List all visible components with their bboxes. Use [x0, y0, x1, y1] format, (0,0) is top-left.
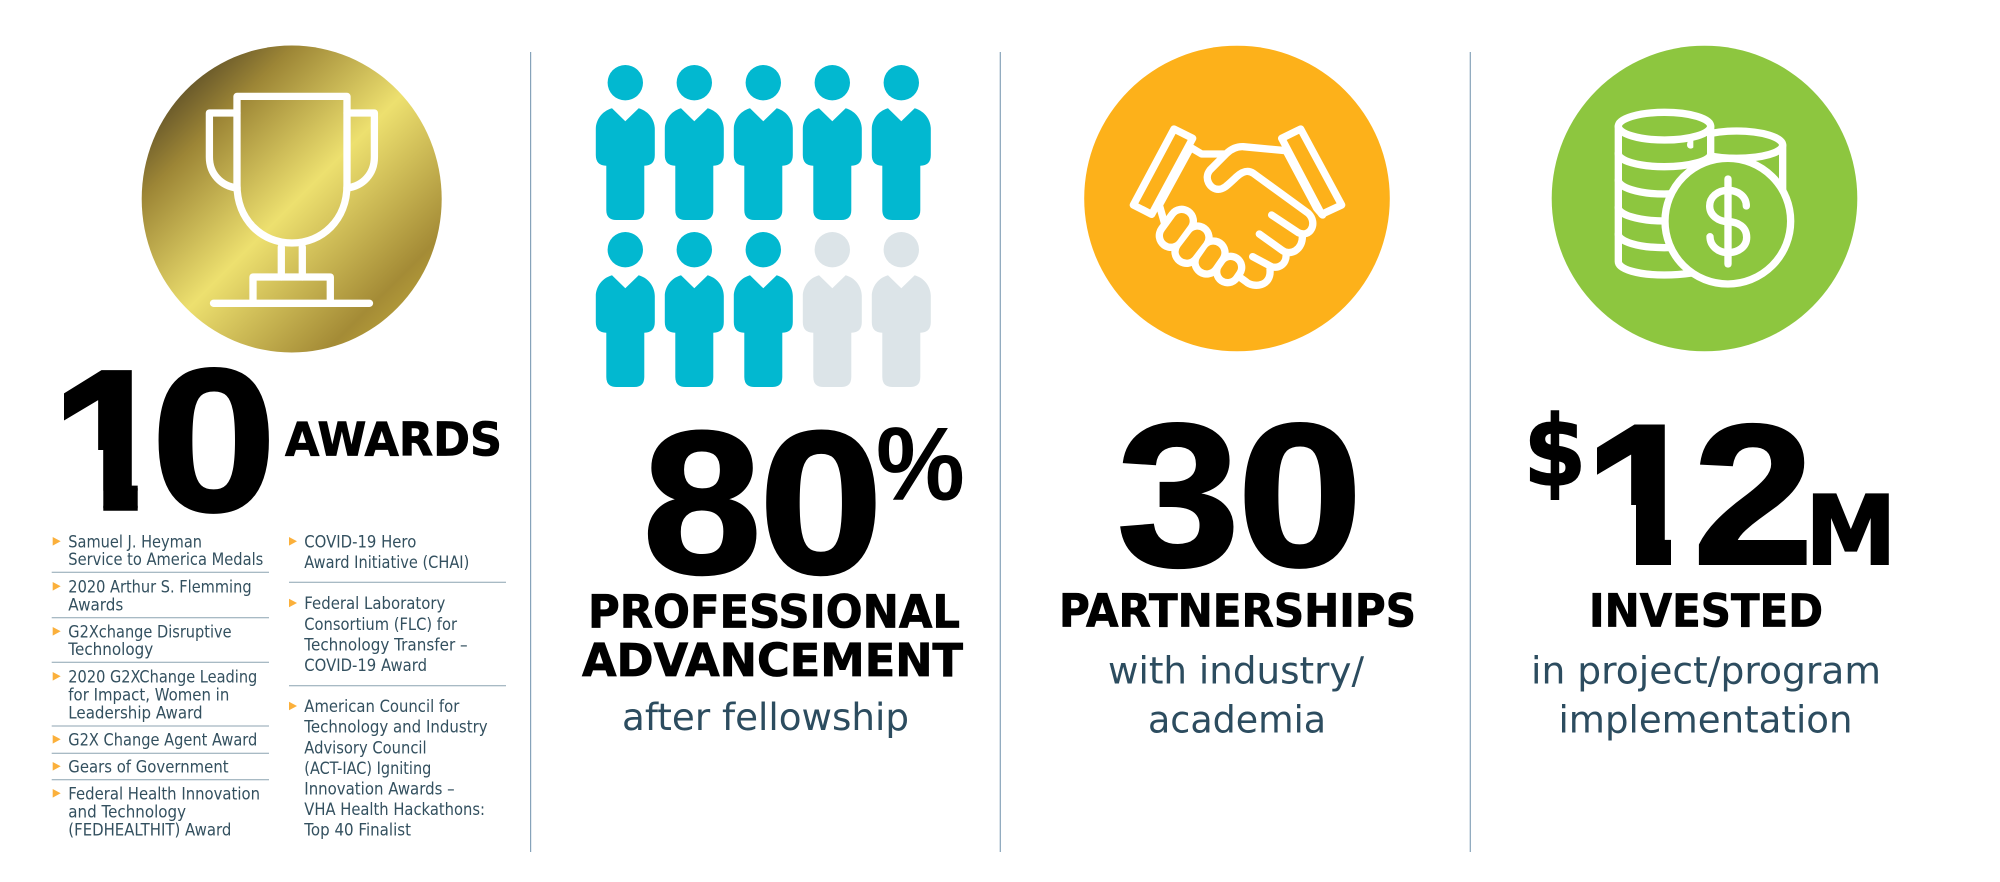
- big number 10: 0: [151, 326, 277, 554]
- award: FEDHEALTHIT: [53, 784, 260, 839]
- award: FEDHEALTHIT: and Technology: [68, 802, 186, 821]
- award: Heyman medals: Service to America Medals: [68, 550, 263, 569]
- list: awards column two: [289, 532, 506, 840]
- caption: in project/program implementation: implementation: [1558, 698, 1852, 741]
- award: G2XChange leading: [53, 667, 257, 722]
- award: Heyman medals: [53, 532, 263, 569]
- icon: coins in green circle: [1552, 46, 1857, 351]
- award: change agent: G2X Change Agent Award: [68, 731, 257, 750]
- award: ACT-IAC: American Council for: [304, 697, 459, 716]
- award: FEDHEALTHIT: (FEDHEALTHIT) Award: [68, 820, 231, 839]
- award: COVID-19 hero: COVID-19 Hero: [304, 532, 416, 551]
- heading: professional advancement: PROFESSIONAL: [588, 585, 960, 638]
- award: FLC: Technology Transfer –: [303, 635, 468, 654]
- award: ACT-IAC: [289, 697, 488, 840]
- big number 30: 0: [1237, 381, 1363, 609]
- big number 30: [1117, 381, 1363, 610]
- icon: handshake in orange circle: [1084, 46, 1390, 351]
- icon: gold trophy medallion: [142, 46, 442, 352]
- pictogram: eight of ten people highlighted: [596, 65, 931, 387]
- award: COVID-19 hero: [289, 532, 469, 572]
- award: ACT-IAC: Innovation Awards –: [304, 779, 455, 798]
- big number 30: 3: [1117, 382, 1240, 610]
- award: ACT-IAC: (ACT-IAC) Igniting: [304, 759, 431, 778]
- award: ACT-IAC: Technology and Industry: [303, 718, 488, 737]
- heading: invested: INVESTED: [1589, 585, 1823, 638]
- award: FLC: Consortium (FLC) for: [304, 615, 457, 634]
- award: ACT-IAC: VHA Health Hackathons:: [304, 800, 485, 819]
- big number 10: 1: [52, 330, 168, 550]
- heading: professional advancement: [582, 585, 963, 687]
- award: ACT-IAC: Top 40 Finalist: [303, 821, 411, 840]
- big number 80%: 0: [759, 389, 883, 617]
- award: FLC: [289, 594, 468, 675]
- award: G2XChange leading: for Impact, Women in: [68, 685, 229, 704]
- award: G2Xchange disruptive: [53, 622, 232, 659]
- caption: with industry/academia: with industry/: [1108, 649, 1365, 692]
- big number $12M: M: [1806, 476, 1896, 586]
- panel: investment: [1524, 46, 1896, 741]
- award: FLC: Federal Laboratory: [304, 594, 446, 613]
- big number $12M: 2: [1693, 384, 1814, 607]
- award: Flemming: Awards: [68, 595, 123, 614]
- big number 80%: 8: [642, 390, 762, 617]
- award: FEDHEALTHIT: Federal Health Innovation: [68, 784, 260, 803]
- award: G2XChange leading: Leadership Award: [68, 703, 203, 722]
- award: gears of government: Gears of Government: [68, 757, 229, 776]
- caption: after fellowship: after fellowship: [622, 696, 909, 739]
- caption: with industry/academia: [1108, 649, 1365, 741]
- panel: professional advancement: [582, 65, 965, 739]
- award: FLC: COVID-19 Award: [304, 656, 427, 675]
- caption: in project/program implementation: [1531, 649, 1881, 741]
- award: G2XChange leading: 2020 G2XChange Leading: [68, 667, 257, 686]
- big number 10: [64, 367, 269, 514]
- big number 80%: %: [876, 406, 965, 522]
- panel: awards: [52, 46, 506, 840]
- award: ACT-IAC: Advisory Council: [304, 738, 427, 757]
- heading: partnerships: PARTNERSHIPS: [1059, 585, 1416, 638]
- caption: in project/program implementation: in project/program: [1531, 649, 1881, 692]
- panel: partnerships: [1059, 46, 1416, 741]
- big number 80%: [642, 389, 965, 617]
- heading: awards: AWARDS: [285, 413, 502, 467]
- award: Heyman medals: Samuel J. Heyman: [68, 532, 202, 551]
- award: Flemming: 2020 Arthur S. Flemming: [68, 578, 252, 597]
- award: Flemming: [53, 578, 252, 614]
- big number $12M: [1530, 410, 1889, 565]
- award: COVID-19 hero: Award Initiative (CHAI): [304, 553, 469, 572]
- caption: with industry/academia: academia: [1148, 698, 1326, 741]
- list: awards column one: [52, 532, 269, 839]
- award: G2Xchange disruptive: G2Xchange Disruptive: [68, 622, 232, 641]
- heading: professional advancement: ADVANCEMENT: [582, 634, 963, 687]
- big number $12M: 1: [1586, 384, 1701, 604]
- big number $12M: $: [1524, 396, 1586, 509]
- award: G2Xchange disruptive: Technology: [67, 640, 154, 659]
